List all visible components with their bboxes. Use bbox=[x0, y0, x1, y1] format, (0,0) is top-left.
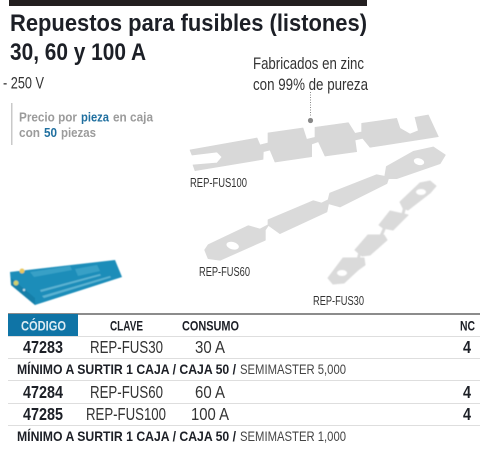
callout: zinc purity bbox=[253, 54, 368, 123]
price note: piezas bbox=[61, 126, 96, 140]
price note: en caja bbox=[113, 110, 154, 124]
price note: pieza bbox=[81, 110, 110, 124]
top black bar bbox=[9, 0, 367, 6]
title: Repuestos para fusibles (listones) bbox=[10, 10, 367, 37]
fuse: REP-FUS30 bbox=[328, 181, 436, 284]
header labels: NC bbox=[460, 318, 475, 334]
title: 30, 60 y 100 A bbox=[10, 39, 146, 66]
row 47283 bbox=[23, 337, 471, 357]
row 47285 bbox=[23, 404, 471, 424]
callout: zinc purity: Fabricados en zinc bbox=[253, 54, 364, 73]
header labels bbox=[110, 318, 475, 334]
row 47284: 47284 bbox=[23, 382, 63, 402]
price note bbox=[11, 103, 154, 145]
fuse labels: REP-FUS30 bbox=[313, 294, 364, 308]
fuse labels bbox=[190, 176, 364, 308]
row 47284: REP-FUS60 bbox=[90, 382, 163, 402]
table top rule bbox=[8, 313, 480, 315]
price note: 50 bbox=[44, 126, 57, 140]
row 47283: 4 bbox=[463, 337, 471, 357]
fuse labels: REP-FUS100 bbox=[190, 176, 247, 190]
fuse: REP-FUS100 bbox=[190, 115, 438, 171]
row 47285: REP-FUS100 bbox=[86, 404, 166, 424]
voltage spec: - 250 V bbox=[3, 74, 44, 92]
row 47285: 100 A bbox=[191, 404, 229, 424]
fuse: REP-FUS60 bbox=[205, 147, 445, 260]
row 47283: 30 A bbox=[195, 337, 225, 357]
product box image bbox=[10, 260, 122, 305]
row 47283: REP-FUS30 bbox=[90, 337, 163, 357]
price note: Precio por bbox=[19, 110, 77, 124]
row 47284: 4 bbox=[463, 382, 471, 402]
price note: con bbox=[19, 126, 40, 140]
row 47284 bbox=[23, 382, 471, 402]
callout: zinc purity: con 99% de pureza bbox=[253, 75, 368, 94]
fuse labels: REP-FUS60 bbox=[199, 265, 250, 279]
row 47283: 47283 bbox=[23, 337, 63, 357]
minimum order note 1: MÍNIMO A SURTIR 1 CAJA / CAJA 50 / bbox=[17, 361, 236, 377]
row 47284: 60 A bbox=[195, 382, 225, 402]
header: codigo: CÓDIGO bbox=[21, 316, 66, 334]
table bbox=[8, 313, 480, 444]
row 47285: 47285 bbox=[23, 404, 63, 424]
row 47285: 4 bbox=[463, 404, 471, 424]
minimum order note 1: SEMIMASTER 5,000 bbox=[240, 361, 346, 377]
title bbox=[10, 10, 367, 66]
header labels: CLAVE bbox=[110, 318, 143, 334]
header labels: CONSUMO bbox=[182, 318, 239, 334]
minimum order note 2: MÍNIMO A SURTIR 1 CAJA / CAJA 50 / bbox=[17, 428, 236, 444]
header: codigo bbox=[8, 314, 78, 336]
minimum order note 2: SEMIMASTER 1,000 bbox=[240, 428, 346, 444]
